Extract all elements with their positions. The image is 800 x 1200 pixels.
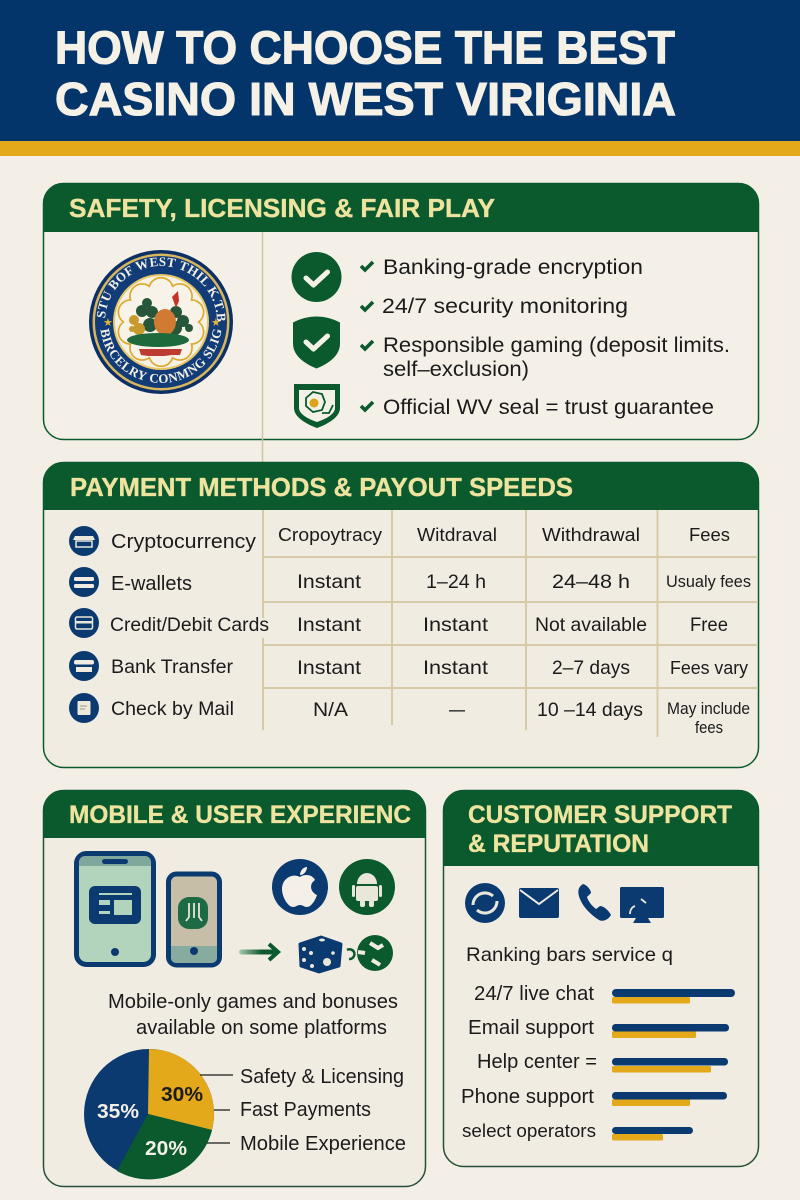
panel: customer support and reputation <box>443 790 759 1166</box>
icon: dice <box>300 937 341 972</box>
support ranking bars: Help center = <box>477 1051 597 1073</box>
arrow <box>239 944 278 960</box>
pie chart: 20% <box>145 1138 187 1160</box>
payout table: Witdraval <box>417 525 497 545</box>
icon: e-wallet <box>69 567 99 597</box>
mobile note: available on some platforms <box>136 1017 387 1039</box>
payout table: May include <box>667 700 750 718</box>
mobile note: Mobile-only games and bonuses <box>108 991 398 1013</box>
icon: bank transfer <box>69 651 99 681</box>
title <box>55 22 676 125</box>
icon: credit card <box>69 608 99 638</box>
icon: West Virginia seal: ★ <box>103 317 113 329</box>
heading: support: & REPUTATION <box>468 830 649 858</box>
support ranking bars: 24/7 live chat <box>474 983 594 1005</box>
heading: mobile: MOBILE & USER EXPERIENC <box>69 801 411 829</box>
safety checklist <box>361 256 730 419</box>
icon: envelope <box>519 888 559 918</box>
support ranking bars: select operators <box>462 1120 596 1141</box>
icon: West Virginia seal: BIRCELRY CONMNG SLIG <box>100 328 222 383</box>
icon: android <box>339 859 395 915</box>
payment method list: Bank Transfer <box>111 657 234 678</box>
pie chart: 35% <box>97 1101 139 1123</box>
heading: support <box>468 801 732 858</box>
support ranking bars <box>461 983 735 1141</box>
icon: seal shield <box>294 384 340 428</box>
safety checklist: self–exclusion) <box>383 358 529 381</box>
payment method list: Credit/Debit Cards <box>110 615 269 636</box>
support ranking bars: Phone support <box>461 1086 594 1108</box>
payout table <box>260 510 758 737</box>
title: HOW TO CHOOSE THE BEST <box>55 22 675 74</box>
icon: phone <box>168 874 220 965</box>
payout table: Free <box>690 614 728 636</box>
pie legend: Fast Payments <box>240 1099 371 1121</box>
icon: apple <box>272 859 328 915</box>
icon: shield check <box>293 316 340 368</box>
mobile note <box>108 991 398 1039</box>
pie legend: Safety & Licensing <box>240 1066 404 1088</box>
pie legend: Mobile Experience <box>240 1133 406 1155</box>
icon: cryptocurrency <box>69 526 99 556</box>
safety checklist: Official WV seal = trust guarantee <box>383 396 714 419</box>
payment method list: Cryptocurrency <box>111 531 256 553</box>
safety checklist: 24/7 security monitoring <box>382 295 628 318</box>
icon: West Virginia seal: ★ <box>211 317 221 329</box>
pie chart: 30% <box>161 1084 203 1106</box>
icon: check circle <box>292 252 342 302</box>
payout table: Withdrawal <box>542 525 640 545</box>
payout table: — <box>449 699 465 721</box>
payout table: Instant <box>297 571 362 593</box>
payout table: 10 –14 days <box>537 699 643 721</box>
icon: West Virginia seal <box>89 250 233 394</box>
panel: safety, licensing and fair play <box>42 182 760 462</box>
safety checklist: Responsible gaming (deposit limits. <box>383 334 730 357</box>
icon: phone handset <box>578 884 611 921</box>
payout table: fees <box>695 719 723 737</box>
payout table: Not available <box>535 614 647 636</box>
payout table: N/A <box>313 699 348 721</box>
payout table: 1–24 h <box>426 571 486 593</box>
icon: tablet <box>76 854 154 964</box>
payment method list: Check by Mail <box>111 699 234 720</box>
icon: West Virginia seal: STU BOF WEST THIL K.T.B <box>96 257 226 322</box>
panel: mobile and user experience <box>43 790 426 1186</box>
payout table: Instant <box>423 657 489 679</box>
icon: bonus badge <box>347 935 393 971</box>
support ranking bars: Email support <box>468 1017 594 1039</box>
pie legend <box>200 1066 406 1155</box>
payout table: Fees vary <box>670 658 748 678</box>
heading: safety: SAFETY, LICENSING & FAIR PLAY <box>69 193 495 223</box>
heading: support: CUSTOMER SUPPORT <box>468 801 732 829</box>
payout table: Instant <box>297 614 362 636</box>
title: CASINO IN WEST VIRIGINIA <box>55 73 676 125</box>
payout table: 24–48 h <box>552 571 630 593</box>
payout table: 2–7 days <box>552 657 630 679</box>
payout table: Fees <box>689 525 730 545</box>
payout table: Usualy fees <box>666 572 751 591</box>
icon: check by mail <box>69 693 99 723</box>
payout table: Instant <box>423 614 489 636</box>
payout table: Instant <box>297 657 362 679</box>
icon: monitor <box>620 887 664 923</box>
safety checklist: Banking-grade encryption <box>383 256 643 279</box>
payout table: Cropoytracy <box>278 525 382 545</box>
payment method list: E-wallets <box>111 573 192 595</box>
icon: live chat <box>465 883 505 923</box>
payment method list <box>69 526 269 723</box>
bars caption: Ranking bars service q <box>466 944 673 966</box>
panel: payment methods and payout speeds <box>43 462 759 768</box>
heading: payments: PAYMENT METHODS & PAYOUT SPEEDS <box>70 472 573 502</box>
pie chart <box>84 1049 214 1179</box>
header banner <box>0 0 800 156</box>
